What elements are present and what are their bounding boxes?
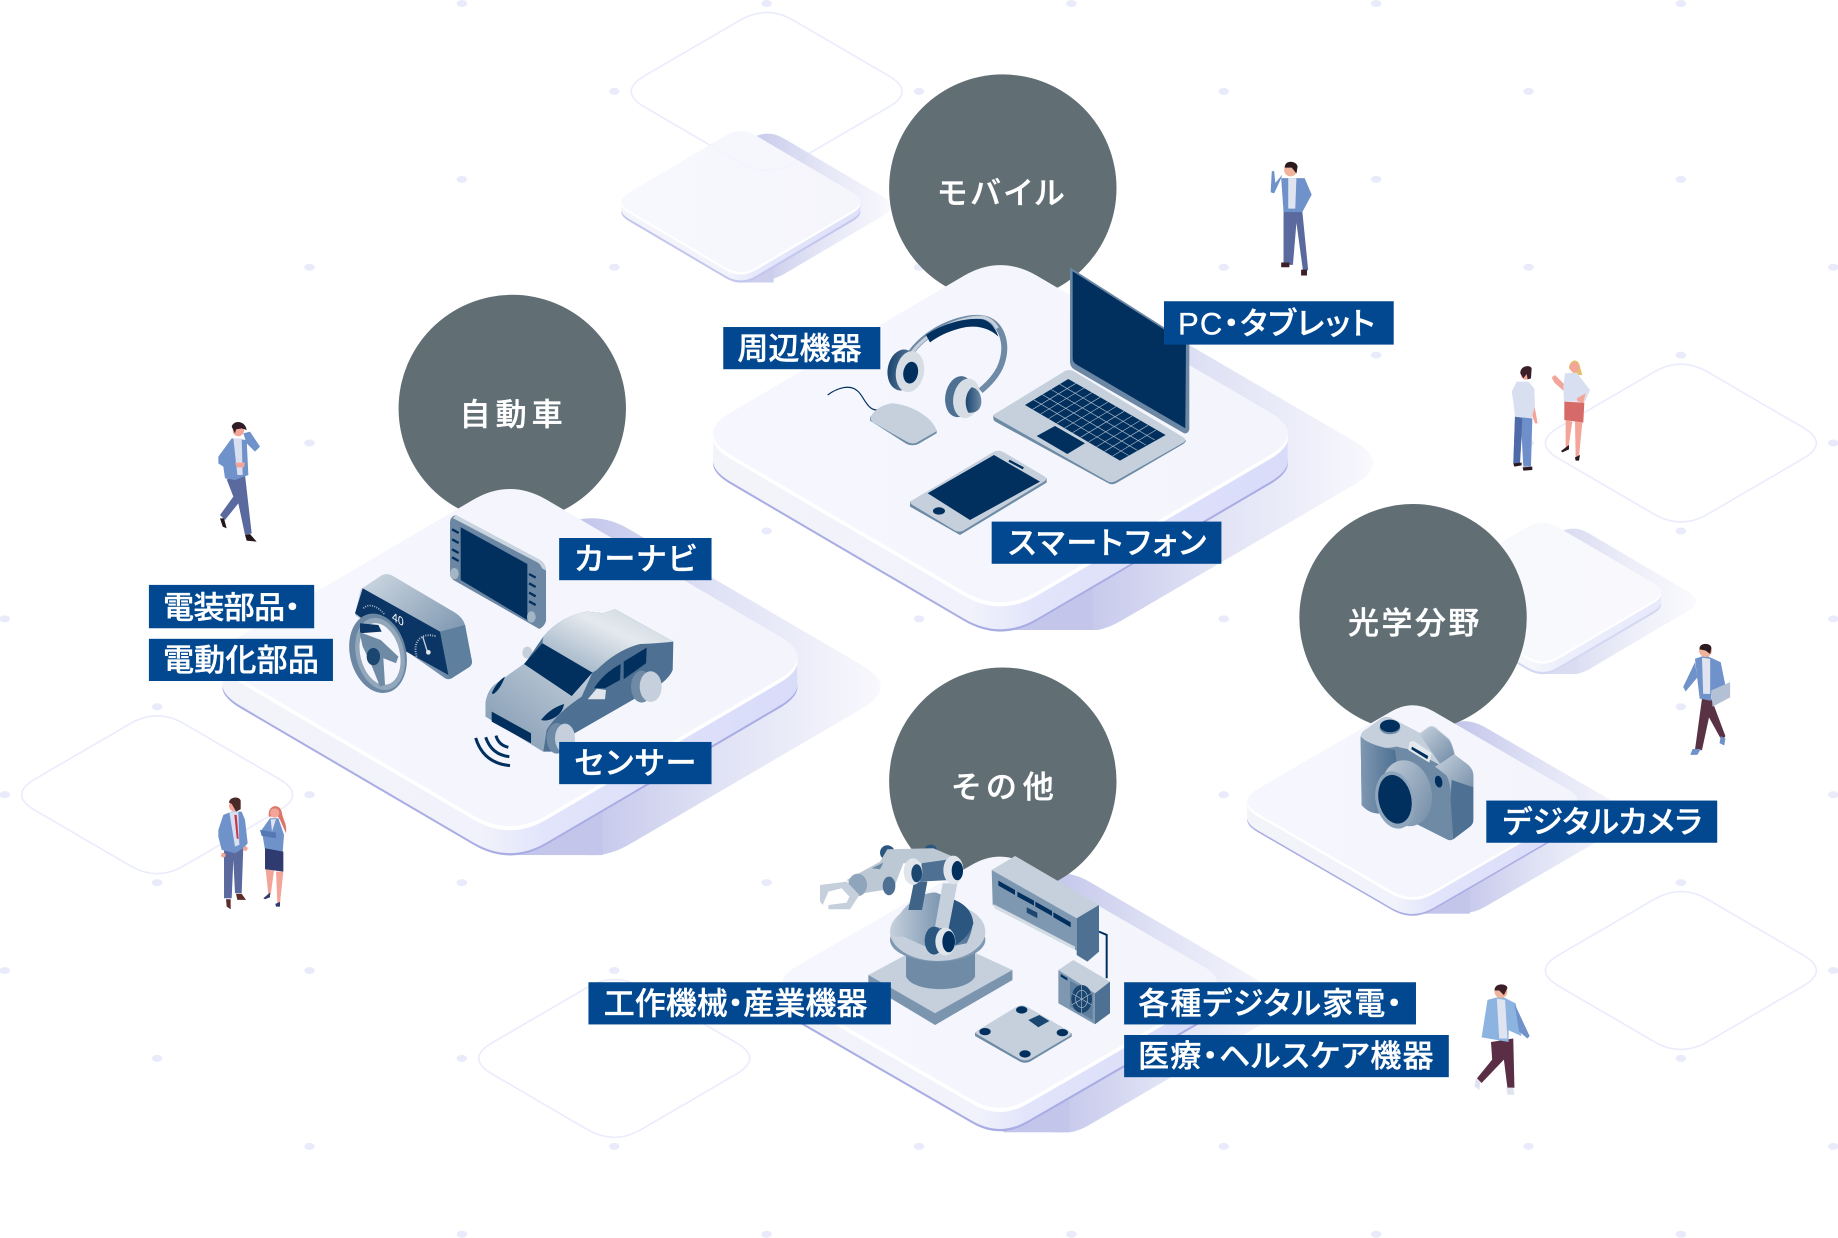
icon: mouse: [828, 387, 937, 445]
label: peripherals: 周辺機器: [737, 331, 862, 366]
faded empty platform: top: [621, 131, 891, 283]
label: digital camera: デジタルカメラ: [1503, 805, 1702, 840]
label: pc tablet: PC・タブレット: [1178, 307, 1375, 342]
icon: sensor waves: [476, 736, 510, 766]
label: sensor: センサー: [574, 746, 696, 781]
icon: car: [486, 609, 673, 754]
people: couple lower left: [218, 798, 286, 909]
label: pc tablet: [1164, 301, 1394, 345]
category name: automotive: 自動車: [460, 397, 563, 432]
panel: other: [588, 668, 1449, 1133]
category circle: optics: [1299, 504, 1527, 731]
icon: camera: [1361, 717, 1473, 840]
category name: other: その他: [952, 770, 1054, 805]
label: medical healthcare: 医療・ヘルスケア機器: [1138, 1039, 1434, 1074]
icon: car navigation: [450, 515, 546, 629]
panel: mobile: [713, 74, 1394, 632]
people: couple upper right: [1512, 360, 1590, 471]
icon: outdoor unit: [1058, 960, 1110, 1024]
icon: weighing scale: [975, 1005, 1072, 1063]
category circle: other: [889, 668, 1117, 895]
panel: optics: [1247, 504, 1717, 916]
label: machine tools: 工作機械・産業機器: [604, 986, 867, 1021]
category name: mobile: モバイル: [938, 176, 1064, 211]
platform: automotive: [222, 489, 797, 855]
category circle: automotive: [399, 295, 626, 522]
icon: smartphone: [910, 451, 1047, 535]
icon: laptop: [993, 267, 1189, 484]
label: sensor: [559, 742, 712, 784]
platform: other: [783, 857, 1217, 1131]
icon: dashboard and steering wheel: 40: [392, 609, 404, 630]
panel: automotive: [149, 295, 881, 855]
label: electrification components: 電動化部品: [163, 643, 319, 678]
person: man with folder: [1683, 644, 1730, 755]
label: smartphone: スマートフォン: [1008, 526, 1206, 561]
label: peripherals: [723, 327, 880, 369]
icon: headphones: [884, 317, 1004, 420]
label: electrical components: 電装部品・: [163, 590, 300, 625]
platform: optics: [1247, 705, 1578, 916]
label: car navigation: カーナビ: [574, 542, 696, 577]
label: digital appliances: 各種デジタル家電・: [1138, 986, 1402, 1021]
category name: optics: 光学分野: [1348, 606, 1479, 641]
platform: mobile: [713, 265, 1288, 632]
label: car navigation: [559, 538, 712, 580]
icon: dashboard and steering wheel: [341, 574, 472, 699]
label: electrical components: [149, 585, 314, 628]
icon: robot arm: [820, 845, 1012, 1025]
person: man pointing upper right: [1271, 162, 1312, 275]
person: man walking on phone: [218, 422, 260, 542]
person: walking man lower right: [1475, 984, 1530, 1095]
category circle: mobile: [889, 74, 1117, 302]
faded empty platform: right: [1517, 528, 1678, 674]
icon: air conditioner: [992, 856, 1107, 978]
